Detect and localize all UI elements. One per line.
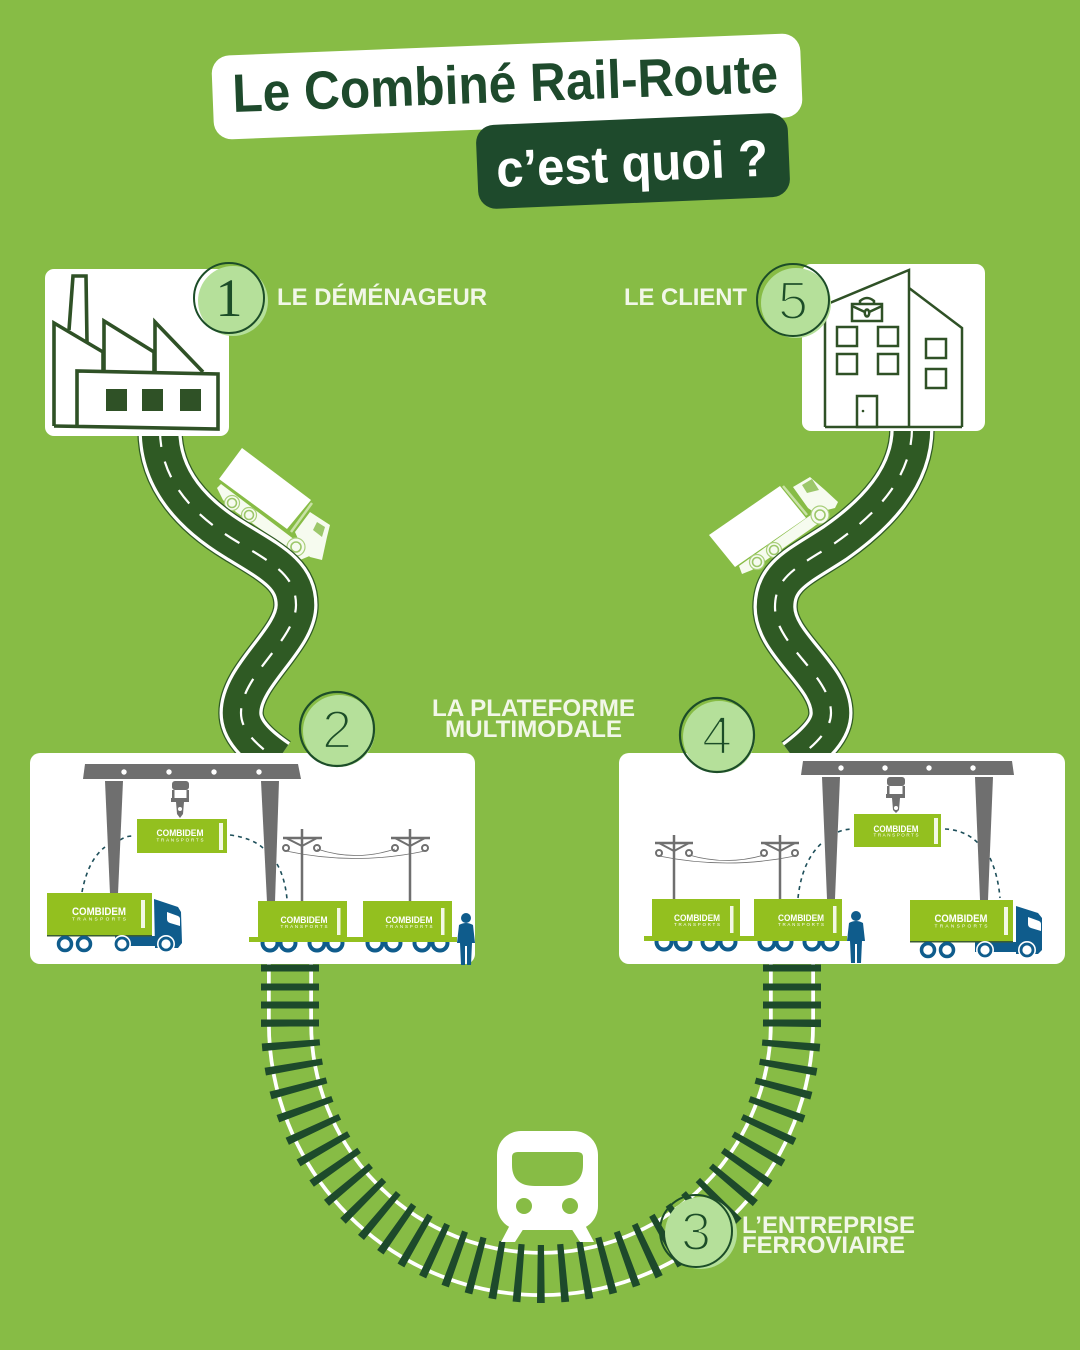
truck with container: COMBIDEM (934, 913, 988, 925)
label: la plateforme multimodale: LA PLATEFORME (432, 695, 635, 722)
train wagons: TRANSPORTS (778, 922, 824, 927)
train wagons: TRANSPORTS (674, 922, 720, 927)
truck with container (910, 900, 1042, 959)
panel: right multimodal platform (619, 753, 1065, 964)
label: le client: LE CLIENT (624, 284, 747, 311)
panel: factory card (45, 269, 229, 436)
step badge 2: 2 (322, 700, 352, 760)
step badge 5 (757, 264, 831, 338)
electric poles (655, 835, 799, 899)
train wagons: TRANSPORTS (280, 924, 328, 929)
train wagons: TRANSPORTS (386, 924, 432, 929)
hanging container: TRANSPORTS (874, 832, 918, 838)
step badge 5: 5 (778, 271, 808, 331)
train wagons (249, 901, 457, 950)
step badge 3 (660, 1195, 737, 1269)
hanging container: COMBIDEM (874, 824, 919, 835)
electric poles (283, 829, 430, 901)
subtitle (475, 113, 791, 209)
icon: worker (847, 911, 865, 963)
icon: factory (54, 276, 218, 429)
road: left (160, 430, 296, 760)
title: Le Combiné Rail-Route (231, 44, 779, 124)
icon: left truck (217, 448, 330, 560)
train wagons: COMBIDEM (280, 915, 328, 926)
truck with container: TRANSPORTS (72, 916, 126, 922)
truck with container (47, 893, 182, 953)
label: l'entreprise ferroviaire: L’ENTREPRISE (742, 1212, 915, 1239)
panel: left multimodal platform (30, 753, 475, 965)
train wagons: COMBIDEM (674, 913, 720, 924)
icon: worker (457, 913, 475, 965)
train wagons: COMBIDEM (778, 913, 824, 924)
train wagons (644, 899, 847, 950)
label: l'entreprise ferroviaire (742, 1212, 915, 1259)
gantry crane (83, 764, 301, 902)
icon: right truck (709, 477, 838, 574)
hanging container (137, 819, 227, 853)
truck with container: COMBIDEM (72, 906, 126, 918)
icon: train (497, 1131, 598, 1242)
panel: client card (802, 264, 985, 431)
step badge 4 (680, 698, 755, 773)
step badge 4: 4 (702, 706, 732, 766)
hanging container: TRANSPORTS (156, 838, 204, 842)
dashed lift arcs (82, 835, 287, 899)
icon: office building (825, 270, 962, 427)
label: la plateforme multimodale (432, 695, 635, 743)
hanging container (854, 814, 941, 847)
train wagons: COMBIDEM (386, 915, 433, 926)
step badge 3: 3 (681, 1202, 711, 1262)
label: l'entreprise ferroviaire: FERROVIAIRE (742, 1232, 905, 1259)
subtitle: c’est quoi ? (495, 130, 769, 199)
road: right (775, 428, 912, 760)
label: la plateforme multimodale: MULTIMODALE (445, 716, 622, 743)
truck with container: TRANSPORTS (934, 924, 988, 930)
step badge 1: 1 (216, 268, 242, 328)
dashed lift arcs (798, 829, 1000, 898)
gantry crane (801, 761, 1014, 900)
hanging container: COMBIDEM (156, 828, 204, 839)
step badge 2 (300, 692, 375, 767)
step badge 1 (194, 263, 268, 336)
railway track (261, 960, 821, 1274)
label: le déménageur: LE DÉMÉNAGEUR (277, 283, 487, 311)
